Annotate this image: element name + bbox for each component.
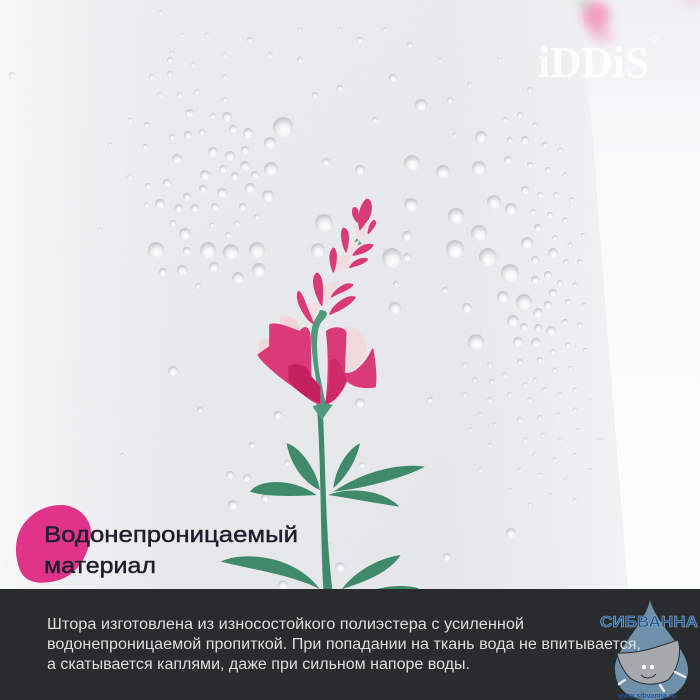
pink blob behind heading (16, 505, 91, 583)
watermark: Sibvanna logo (600, 600, 698, 700)
water droplets on fabric (9, 10, 602, 590)
body text: водонепроницаемой пропиткой. При попадании на ткань вода не впитывается, (47, 636, 641, 653)
dark footer panel (0, 589, 700, 700)
website: www.sibvanna.ru (617, 693, 676, 700)
blossom and buds (258, 199, 376, 420)
blurred flower in the background (577, 0, 700, 42)
bathtub mascot (617, 640, 685, 691)
water drop (615, 600, 688, 700)
heading: материал (44, 553, 156, 578)
body text (47, 616, 641, 673)
brand name: СИБВАННА (600, 614, 698, 631)
curtain fold on the right (578, 0, 700, 590)
main stem and lower leaves (221, 393, 425, 589)
body text: Штора изготовлена из износостойкого полиэстера с усиленной (47, 616, 524, 633)
heading: Водонепроницаемый (44, 522, 298, 547)
body text: а скатывается каплями, даже при сильном напоре воды. (47, 656, 470, 673)
iDDIS logo: iDDiS (538, 38, 649, 87)
heading (44, 522, 298, 578)
flower illustration (221, 199, 425, 589)
